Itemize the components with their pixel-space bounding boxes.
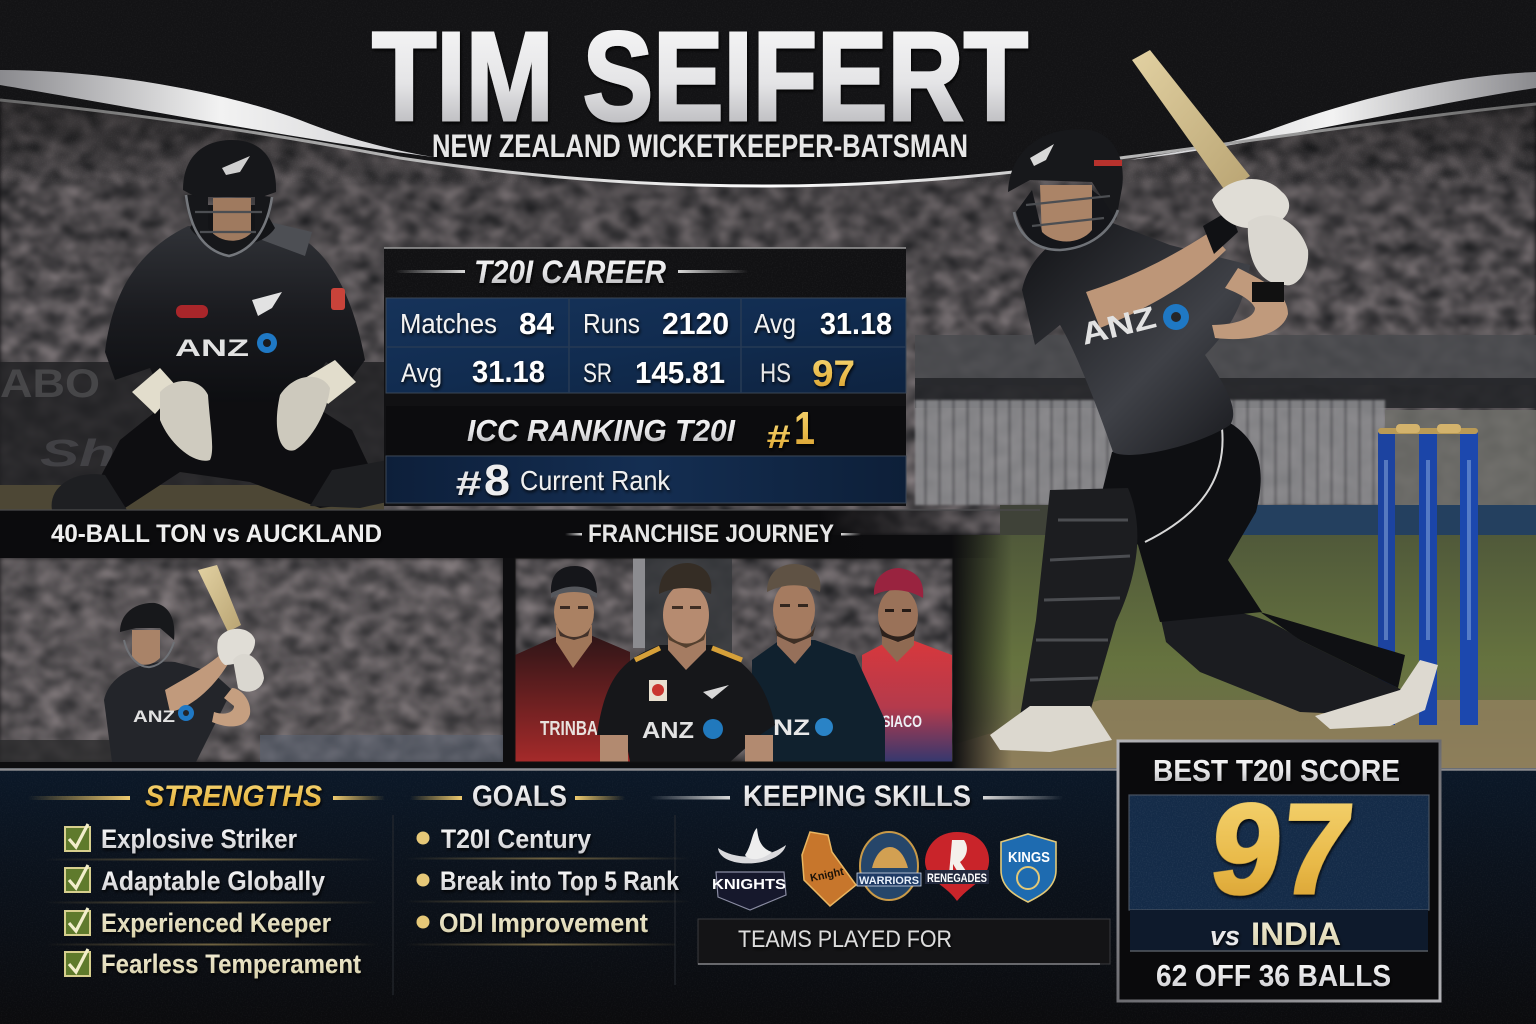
stats table: 145.81 <box>635 355 725 390</box>
current rank band: # <box>455 465 481 503</box>
strength: experienced keeper: Experienced Keeper <box>101 908 331 938</box>
stats table: Avg <box>754 308 796 339</box>
player: Trinbago jersey: TRINBA <box>540 718 598 740</box>
stats table: Matches <box>400 308 497 339</box>
goal: top 5 rank: Break into Top 5 Rank <box>440 866 680 896</box>
stats table: 84 <box>519 306 555 341</box>
stats table: 31.18 <box>820 306 892 341</box>
stats table: 97 <box>812 353 855 394</box>
panel: batting action photo <box>0 558 503 762</box>
current rank band <box>386 456 906 505</box>
section: goals <box>405 780 690 944</box>
opponent band <box>1130 910 1428 952</box>
batsman player figure <box>990 50 1438 752</box>
cricket ground grass and pitch <box>952 535 1536 770</box>
logo: Kings <box>1001 834 1056 902</box>
section: keeping skills <box>650 780 1110 964</box>
heading: 40-ball ton: 40-BALL TON vs AUCKLAND <box>51 520 382 548</box>
ICC ranking band <box>386 402 906 455</box>
ICC ranking band: 1 <box>794 402 815 454</box>
strength: adaptable globally: Adaptable Globally <box>101 866 325 896</box>
section band: captions <box>0 510 1040 558</box>
batsman player figure: ANZ <box>1077 299 1160 352</box>
stats table <box>386 298 906 394</box>
strength: explosive striker: Explosive Striker <box>101 824 297 854</box>
stats table: Avg <box>401 358 442 388</box>
opponent band: vs <box>1210 921 1240 951</box>
strength: fearless temperament: Fearless Temperament <box>101 949 361 979</box>
section: strengths <box>28 780 385 979</box>
logo: Kings: KINGS <box>1008 849 1050 866</box>
background stadium crowd: ABO <box>0 362 100 406</box>
player: Knights black jersey <box>597 563 775 762</box>
wicketkeeper player figure: ANZ <box>175 335 249 362</box>
player: New Zealand navy jersey: NZ <box>773 715 810 740</box>
top title banner with swoosh <box>0 0 1536 186</box>
logo: Renegades: RENEGADES <box>927 871 987 885</box>
panel: best T20I score <box>1118 741 1440 1001</box>
logo: Knights: KNIGHTS <box>712 876 786 893</box>
teams played for box: TEAMS PLAYED FOR <box>738 926 952 953</box>
innings note: 62 OFF 36 BALLS <box>1156 958 1391 993</box>
stats table: 2120 <box>662 306 729 341</box>
stats table: SR <box>583 358 612 388</box>
background stadium crowd: Sh <box>40 433 115 475</box>
icon: check box 3 <box>65 908 90 935</box>
stumps <box>1378 424 1478 725</box>
logo: warriors crest <box>857 832 921 900</box>
bottom panel background <box>0 768 1536 1024</box>
teams played for box <box>698 919 1110 964</box>
player: red and blue jersey: SIACO <box>882 712 922 731</box>
player: Knights black jersey: ANZ <box>642 717 694 743</box>
stats table: 31.18 <box>472 354 545 389</box>
ICC ranking band: # <box>766 419 790 455</box>
logo: warriors crest: WARRIORS <box>859 875 919 887</box>
panel: batting action photo: ANZ <box>133 707 175 726</box>
panel: T20I career stats <box>384 248 906 506</box>
wicketkeeper player figure <box>52 140 405 510</box>
heading: T20I career: T20I CAREER <box>474 254 666 290</box>
stats table: Runs <box>583 308 640 339</box>
icon: check box 4 <box>65 949 90 976</box>
current rank band: 8 <box>484 456 510 505</box>
heading: T20I career <box>395 254 748 290</box>
logo: orange team crest: Knight <box>809 866 845 885</box>
logo: Renegades <box>925 832 989 901</box>
heading: strengths: STRENGTHS <box>145 780 322 813</box>
player: New Zealand navy jersey <box>752 564 885 762</box>
panel: franchise journey photo <box>515 558 953 762</box>
heading: franchise journey: FRANCHISE JOURNEY <box>588 520 834 548</box>
opponent band: INDIA <box>1251 916 1341 952</box>
title: TIM SEIFERT <box>372 6 1028 147</box>
heading: goals: GOALS <box>472 780 567 813</box>
subtitle: NEW ZEALAND WICKETKEEPER-BATSMAN <box>432 128 968 164</box>
logo: Knights <box>712 828 786 910</box>
score panel <box>1129 778 1429 921</box>
ICC ranking band: ICC RANKING T20I <box>467 413 736 448</box>
icon: check box 1 <box>65 824 90 851</box>
heading: best T20I score: BEST T20I SCORE <box>1153 753 1400 788</box>
player: red and blue jersey <box>862 568 952 762</box>
goal: ODI improvement: ODI Improvement <box>439 908 648 938</box>
logo: orange team crest <box>802 832 856 906</box>
player: Trinbago jersey <box>515 566 630 762</box>
score panel: 97 <box>1204 778 1359 921</box>
heading: keeping skills: KEEPING SKILLS <box>743 780 971 813</box>
stats table: HS <box>760 358 791 388</box>
current rank band: Current Rank <box>520 465 671 496</box>
goal: T20I century: T20I Century <box>441 824 591 854</box>
icon: check box 2 <box>65 865 90 892</box>
